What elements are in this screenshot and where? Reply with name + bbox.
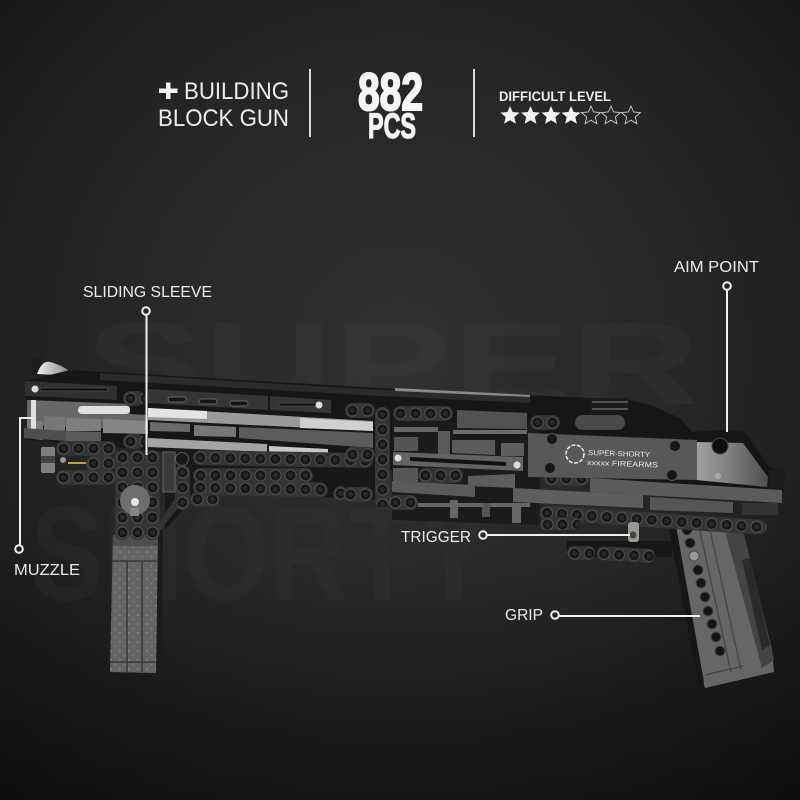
header: piece count: 882 [358,63,423,122]
ghost background text [30,298,700,629]
header: piece count [358,63,423,146]
barrel top block [25,381,331,413]
header: product name: BLOCK GUN [158,105,289,132]
label: grip: GRIP [505,607,543,624]
label: muzzle: MUZZLE [14,562,80,579]
front grip [110,530,163,673]
ghost background text: SHORTY [30,478,490,629]
dark upper body [25,370,785,492]
label: grip [505,607,700,624]
label: trigger [401,529,630,546]
lower dark fill [165,440,382,530]
lower frame bars [513,478,782,515]
ghost background text: SUPER [85,298,700,430]
left lattice beams [41,441,116,485]
header: product name [158,78,289,132]
gun: building block shotgun [24,358,785,688]
header: piece count: PCS [368,107,416,146]
label: muzzle [14,418,80,579]
grip [668,518,774,688]
header: difficulty level [499,89,640,124]
receiver plate with engraving [528,433,697,480]
receiver plate with engraving: SUPER-SHORTY [588,448,650,459]
front sight [32,358,74,376]
label: sliding sleeve [83,284,212,455]
vertical beams and wheel [115,450,220,540]
middle lattice beams [123,391,390,507]
receiver plate with engraving: xxxxx FIREARMS [587,458,658,469]
header divider left [309,69,311,137]
header divider right [473,69,475,137]
header: difficulty level: DIFFICULT LEVEL [499,89,611,104]
label: trigger: TRIGGER [401,529,471,546]
barrel and sliding sleeve [24,400,373,457]
header: product name: BUILDING [184,78,289,105]
lower rail beam [539,505,767,535]
rear sight block [697,438,785,490]
label: aim point: AIM POINT [674,259,759,276]
label: aim point [674,259,759,432]
trigger assembly [540,517,672,563]
label: sliding sleeve: SLIDING SLEEVE [83,284,212,301]
receiver lattice [388,398,628,523]
